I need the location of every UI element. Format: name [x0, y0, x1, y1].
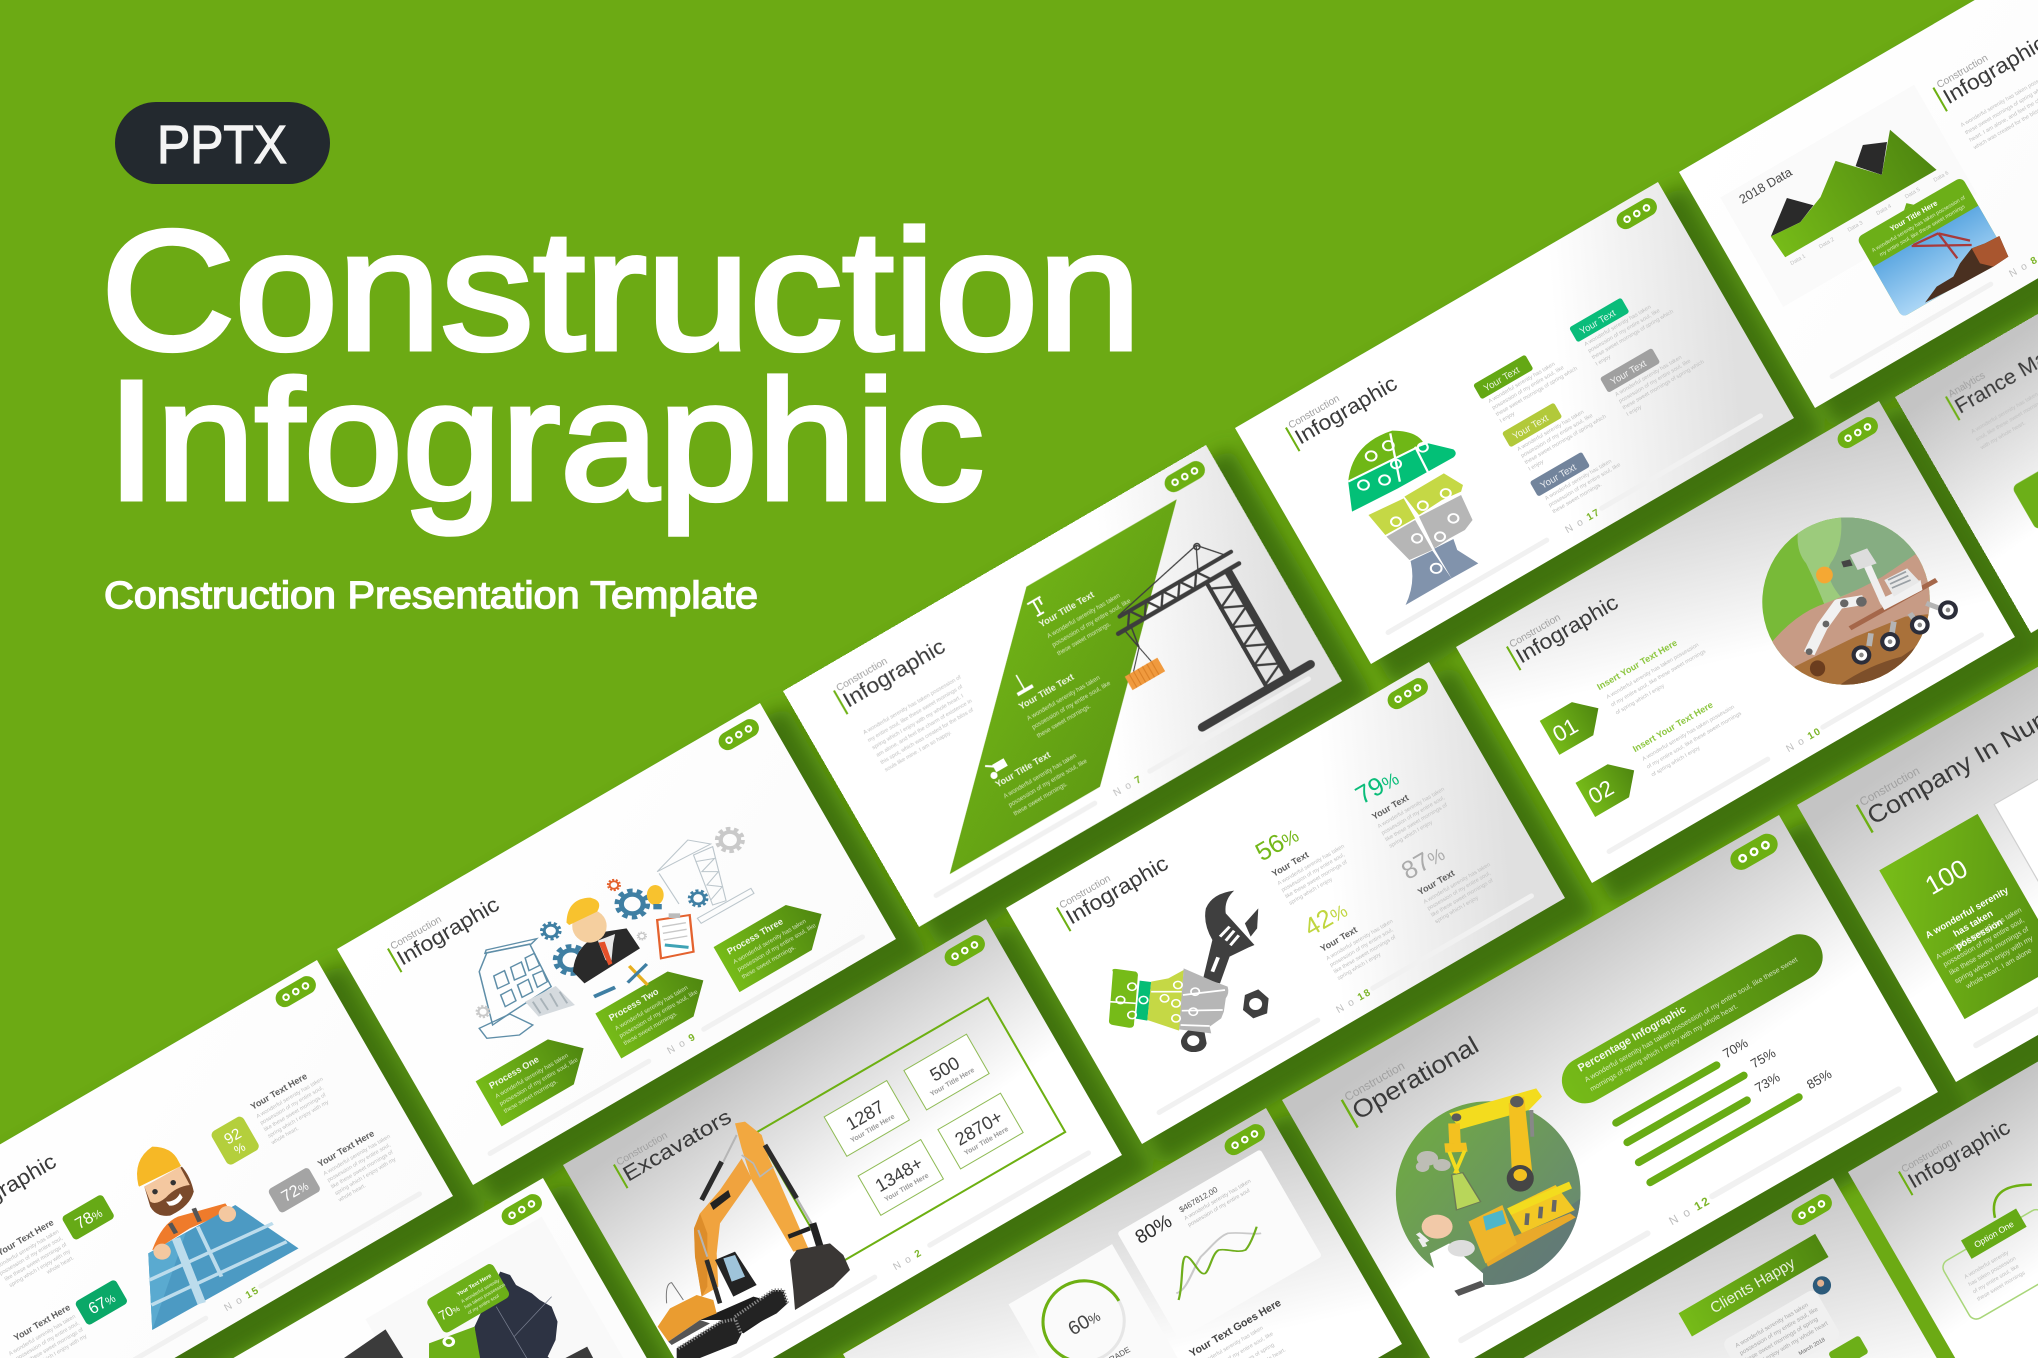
ring: 60% [1028, 1266, 1139, 1358]
item: first title: possession of my entire soul, like [1051, 597, 1133, 649]
label: slate [1530, 438, 1626, 518]
stat: 56%: A wonderful serenity has taken [1277, 844, 1346, 887]
callout pill: mornings of spring which I enjoy with my whole heart. [1589, 1002, 1739, 1093]
building outline [479, 939, 551, 1038]
callout: process one: A wonderful serenity has taken [494, 1052, 570, 1100]
stat box: 2870+ [938, 1093, 1023, 1169]
panel: slide No 17 helmet: Construction [1287, 393, 1342, 431]
item: second title [1005, 636, 1117, 740]
area chart: Data 1 [1790, 254, 1807, 267]
stat: 92%: 92 [221, 1125, 245, 1148]
stat: 87%: spring which I enjoy [1434, 895, 1480, 925]
line chart [1176, 1227, 1261, 1300]
clipboard [657, 913, 694, 958]
callout pill: A wonderful serenity has taken possession of my entire soul, like these sweet [1583, 956, 1799, 1084]
stat box: 1348+: Your Title Here [883, 1171, 930, 1204]
text: insert 2: Insert Your Text Here [1631, 700, 1715, 754]
text: insert 1: A wonderful serenity has taken possession [1606, 642, 1700, 701]
outlined box [1994, 715, 2038, 953]
arrow: 02: 02 [1584, 775, 1618, 809]
panel: slide No 10 rover: N o 10 [1785, 726, 1824, 755]
panel: slide France map: Analytics [1947, 370, 1987, 400]
text block: intro: spring which I enjoy with my whole heart. I [871, 693, 965, 751]
plans [525, 986, 575, 1017]
panel: slide France map: A wonderful serenity has taken [1971, 392, 2038, 435]
stat: 87%: 87% [1397, 839, 1449, 886]
stat box: 2870+: 2870+ [951, 1106, 1006, 1150]
panel: slide No 2 excavators: N o 2 [892, 1247, 925, 1273]
panel: slide option one: Construction [1900, 1137, 1955, 1175]
panel: slide company in numbers [1797, 520, 2038, 1082]
label: lime: A wonderful serenity has taken [1516, 409, 1585, 453]
text block: lower right [315, 1122, 407, 1204]
green stat card: possession [1954, 917, 2005, 953]
text block: your text: Your Text Goes Here [1187, 1297, 1283, 1358]
card: line chart [1117, 1149, 1322, 1340]
stat: 87%: Your Text [1416, 868, 1456, 897]
stat: 56%: possession of my entire soul, [1281, 852, 1346, 894]
panel: slide No 9 process [337, 703, 896, 1185]
illustration: puzzle head [1348, 431, 1478, 605]
stat: 42%: possession of my entire soul, [1329, 927, 1395, 969]
label: gray: Your Text [1609, 358, 1649, 388]
stat: 42%: like these sweet mornings of [1333, 934, 1397, 975]
header band [1679, 1234, 1829, 1336]
label: lime: Your Text [1511, 413, 1551, 442]
green button [1828, 1335, 1869, 1358]
chart heading: 2018 Data [1737, 165, 1795, 207]
stat: 72%: 72% [278, 1176, 312, 1206]
text block: lower left: A wonderful serenity has taken [8, 1314, 77, 1357]
option label [1961, 1208, 2027, 1259]
callout: 70% [425, 1262, 512, 1334]
quote card: possession of my entire soul, like [1738, 1306, 1820, 1357]
stat: 56% [1251, 803, 1357, 908]
arrow: 01 [1540, 692, 1609, 755]
photo: building and crane [1912, 233, 2008, 303]
stat: 78% [61, 1194, 115, 1241]
stat: 80%: 80% [1132, 1211, 1176, 1249]
label: green: Your Text [1482, 365, 1522, 394]
panel: slide No 7 crane [783, 445, 1342, 927]
green stat card [1879, 814, 2038, 1019]
area chart [1754, 115, 1950, 269]
panel: slide No 18 wrench: N o 18 [1335, 987, 1374, 1016]
photo card: Your Title Here [1888, 199, 1939, 233]
arc arrow [1985, 1177, 2037, 1218]
ring: 60%: 60% [1065, 1305, 1104, 1340]
text block: intro: my entire soul, like these sweet mornings of [867, 684, 964, 744]
nut [1243, 989, 1269, 1018]
item: third title: these sweet mornings. [1012, 781, 1069, 818]
stat: 42% [1299, 878, 1406, 983]
text block: upper left [0, 1217, 76, 1299]
label: lime: these sweet mornings of spring which [1524, 414, 1607, 466]
text block: lower left [1, 1302, 89, 1358]
text block: top right: A wonderful serenity has taken [256, 1077, 324, 1120]
label: teal [1569, 278, 1678, 370]
panel: slide France map: with my whole heart. [1979, 420, 2027, 452]
callout: process two [595, 958, 716, 1058]
illustration: hanging container [1125, 658, 1165, 690]
map of Australia and dark wedges [344, 1272, 593, 1358]
panel: slide France map [1895, 151, 2038, 633]
outlined option box: has taken possession [1968, 1256, 2017, 1288]
quote card [1722, 1288, 1842, 1358]
text block: intro [863, 675, 984, 773]
callout: 70%: of my entire soul [467, 1293, 500, 1316]
callout pill [1553, 926, 1831, 1112]
stat box: 500: Your Title Here [929, 1066, 976, 1098]
badge: PPTX [115, 102, 330, 184]
panel: slide No 12 operational: Operational [1347, 1031, 1483, 1125]
panel: slide No 18 wrench: Construction [1058, 873, 1113, 911]
illustration: robot arm and scientist [1416, 1088, 1576, 1293]
stat: 87%: possession of my entire soul, [1427, 870, 1492, 912]
text block: top right: possession of my entire soul, [259, 1085, 325, 1127]
green parallelogram [845, 499, 1281, 874]
item: second title: A wonderful serenity has taken [1026, 674, 1101, 722]
stat: 42%: Your Text [1319, 925, 1359, 954]
crane outline [657, 840, 754, 923]
green tile [2011, 461, 2038, 531]
text block: upper left: spring which I enjoy with my [8, 1249, 72, 1289]
puzzle hand [1109, 968, 1228, 1033]
text block: lower left: Your Text Here [12, 1302, 72, 1343]
arrow: 01: 01 [1548, 713, 1582, 747]
photo card [1854, 172, 2008, 318]
panel: slide No 9 process: N o 9 [666, 1031, 699, 1057]
illustration: rover [1806, 548, 1958, 676]
illustration: worker with panel [137, 1147, 299, 1330]
green stat card: like these sweet mornings of [1948, 925, 2030, 977]
bulb [647, 885, 664, 909]
item: third title: A wonderful serenity has taken [1002, 752, 1078, 800]
item: second title: possession of my entire soul, like [1031, 680, 1112, 731]
label: green: I enjoy [1499, 411, 1516, 424]
panel: slide No 10 rover [1456, 401, 2015, 883]
text block: lower right: Your Text Here [316, 1128, 376, 1169]
item: first title: Your Title Text [1037, 590, 1096, 629]
item: third title [985, 720, 1094, 818]
text block: upper left: like these sweet mornings of [4, 1242, 68, 1283]
green stat card: A wonderful serenity [1924, 885, 2011, 941]
label: slate: A wonderful serenity has taken [1544, 459, 1613, 502]
green stat card: whole heart. I am alone [1964, 947, 2033, 991]
avatar [1809, 1273, 1834, 1298]
illustration: wrench in puzzle hand [1109, 891, 1269, 1052]
stat box: 2870+: Your Title Here [963, 1125, 1010, 1157]
panel: slide No 17 helmet [1235, 182, 1794, 664]
panel: slide No 18 wrench [1006, 662, 1565, 1144]
photo card: my entire soul, like these sweet mornings [1879, 204, 1966, 258]
panel: slide No 7 crane: N o 7 [1112, 773, 1145, 799]
callout: 70%: has taken possession [463, 1282, 507, 1311]
stat: 80%: A wonderful serenity has taken [1183, 1179, 1252, 1222]
panel: slide No 17 helmet: Infographic [1291, 371, 1402, 449]
stat: 42%: A wonderful serenity has taken [1325, 919, 1394, 962]
main title [101, 196, 1141, 536]
text: insert 2: of my entire soul, like these sweet mornings [1646, 711, 1743, 770]
panel: slide No 2 excavators [563, 919, 1122, 1358]
option label: Option One [1972, 1219, 2016, 1250]
illustration: engineer, building and gears [477, 829, 754, 1038]
tools [594, 964, 648, 997]
title: Construction [1935, 53, 1990, 91]
callout: process three: A wonderful serenity has taken [732, 918, 807, 966]
card: ring [1009, 1244, 1178, 1358]
text block: lower right: whole heart. [337, 1183, 368, 1204]
green stat card: spring which I enjoy with my [1953, 934, 2035, 985]
callout: process two: possession of my entire soul, like [618, 988, 700, 1040]
header band: Clients Happy [1707, 1255, 1799, 1317]
panel: slide company in numbers: Construction [1857, 764, 1922, 809]
stat: 79%: Your Text [1370, 793, 1410, 822]
text block: intro: souls like mine. I am so happy. [884, 730, 953, 773]
label: lime: possession of my entire soul, like [1520, 413, 1594, 459]
stat: 56%: Your Text [1270, 850, 1310, 879]
panel: slide No 2 excavators: Construction [615, 1130, 670, 1168]
illustration: rover scene circle [1762, 518, 1930, 685]
panel: slide No 17 helmet: N o 17 [1564, 507, 1603, 536]
callout: process three: these sweet mornings. [741, 944, 797, 981]
label: lime [1502, 383, 1611, 475]
label: teal: I enjoy [1595, 354, 1612, 368]
label: gray: A wonderful serenity has taken [1614, 355, 1683, 398]
photo card: A wonderful serenity has taken possession of [1871, 195, 1967, 254]
engineer [566, 898, 640, 983]
item: first title: A wonderful serenity has taken [1046, 592, 1121, 640]
badge: PPTX: PPTX [157, 115, 287, 175]
stat box: 1287 [824, 1081, 909, 1156]
text: insert 1: Insert Your Text Here [1595, 638, 1679, 692]
callout: process two: A wonderful serenity has taken [614, 984, 689, 1032]
item: first title: these sweet mornings. [1056, 620, 1113, 657]
area chart: Data 3 [1847, 220, 1864, 234]
text block: top right: like these sweet mornings of [263, 1092, 328, 1133]
area chart: Data 5 [1904, 187, 1921, 200]
panel: slide No 12 operational: Construction [1342, 1059, 1407, 1104]
text block: upper left: possession of my entire soul, [0, 1235, 64, 1277]
green stat card: possession of my entire soul, [1942, 916, 2026, 969]
stat: 56%: like these sweet mornings of [1284, 859, 1349, 900]
label: gray: I enjoy [1626, 404, 1643, 418]
stat: 79%: A wonderful serenity has taken [1377, 787, 1446, 830]
text: insert 1 [1595, 627, 1712, 718]
text block: lower right: spring which I enjoy with my [334, 1157, 397, 1197]
text: insert 1: of spring which I enjoy [1615, 683, 1666, 716]
outlined option box: these sweet mornings [1976, 1270, 2026, 1303]
stat: 42%: spring which I enjoy [1337, 952, 1382, 982]
label: gray: these sweet mornings of spring which [1622, 359, 1705, 411]
label: slate: Your Text [1539, 462, 1579, 492]
stat: 92%: % [232, 1140, 248, 1157]
panel: slide No 7 crane: Construction [835, 656, 890, 694]
label: slate: these sweet mornings. [1552, 482, 1603, 515]
bar chart: 73% [1752, 1069, 1783, 1095]
illustration: excavator [658, 1122, 850, 1358]
stat: 79% [1351, 746, 1457, 851]
quote card: A wonderful serenity has taken [1734, 1302, 1810, 1350]
text: insert 2: of spring which I enjoy [1650, 745, 1701, 778]
callout: process one: possession of my entire soul, like [498, 1056, 580, 1107]
stat: 72% [267, 1167, 321, 1214]
label: gray: possession of my entire soul, like [1618, 358, 1692, 405]
stat: 56%: 56% [1251, 821, 1303, 867]
main title: Construction [101, 196, 1141, 386]
stat box: 1348+ [858, 1140, 943, 1215]
text block: intro: A wonderful serenity has taken possession of [863, 675, 963, 736]
panel: slide No 12 operational: N o 12 [1666, 1193, 1713, 1228]
text block: top right: whole heart. [270, 1125, 300, 1147]
callout: 70%: A wonderful serenity [460, 1278, 501, 1305]
stat box: 1348+: 1348+ [871, 1152, 926, 1196]
outlined option box [1940, 1207, 2038, 1322]
stat: 67%: 67% [85, 1289, 119, 1318]
green stat card: 100 [1920, 853, 1973, 901]
stat: 87%: A wonderful serenity has taken [1423, 862, 1492, 905]
panel: slide Australia map [120, 1178, 679, 1358]
green stat card: has taken [1951, 908, 1995, 940]
label: teal: Your Text [1578, 308, 1618, 337]
callout: process one: these sweet mornings. [503, 1078, 559, 1115]
arrow: 02 [1575, 754, 1644, 817]
panel: slide option one [1848, 926, 2038, 1358]
stat: 78%: 78% [72, 1203, 105, 1233]
stat: 79%: spring which I enjoy [1388, 820, 1434, 850]
panel: slide No 8 area chart [1679, 0, 2038, 408]
callout: process one: Process One [487, 1054, 541, 1091]
label: green: A wonderful serenity has taken [1488, 361, 1556, 405]
panel: slide clients happy [1410, 1178, 1969, 1358]
callout: process three: Process Three [725, 916, 785, 957]
stat box: 500: 500 [926, 1052, 963, 1085]
wrench details [1212, 927, 1239, 972]
stat: 87%: like these sweet mornings of [1430, 878, 1495, 919]
text: insert 1: of my entire soul, like these sweet mornings [1610, 649, 1707, 708]
label: slate: possession of my entire soul, like [1548, 462, 1622, 509]
panel: slide statistics chart [843, 1108, 1402, 1358]
panel: slide No 15 worker [0, 960, 453, 1358]
panel: slide No 2 excavators: Excavators [619, 1105, 735, 1186]
text block: lower right: like these sweet mornings of [330, 1149, 395, 1190]
item: third title: possession of my entire soul, like [1007, 757, 1089, 809]
stat: 80% [1132, 1166, 1256, 1254]
text block: upper left: whole heart. [45, 1255, 76, 1276]
text: insert 2: A wonderful serenity has taken possession [1641, 704, 1736, 763]
text block: lower right: possession of my entire soul, [326, 1142, 392, 1184]
callout: process one [476, 1026, 597, 1126]
stat: 80%: $467812,00 [1178, 1185, 1220, 1215]
green frame [756, 998, 1065, 1267]
panel: slide No 15 worker: N o 15 [223, 1285, 262, 1314]
label: teal: A wonderful serenity has taken [1583, 304, 1652, 348]
panel: slide No 9 process: Construction [389, 914, 444, 952]
illustration: circle scene [1396, 1101, 1580, 1285]
quote card: March 2018 [1798, 1337, 1826, 1357]
bar chart: 70% [1720, 1035, 1751, 1061]
area chart: Data 4 [1875, 204, 1893, 217]
ring hole [1187, 1035, 1199, 1046]
callout: process two: these sweet mornings. [622, 1010, 679, 1047]
item: third title: Your Title Text [994, 750, 1052, 790]
panel: slide No 10 rover: Construction [1508, 612, 1563, 650]
stat: 92% [210, 1115, 261, 1166]
bar chart: 75% [1748, 1045, 1779, 1071]
main title: Infographic [107, 346, 984, 536]
panel: slide option one: Infographic [1904, 1115, 2015, 1193]
label: gray [1600, 329, 1709, 420]
stat: 42%: 42% [1299, 896, 1352, 942]
callout: process two: Process Two [607, 986, 661, 1023]
illustration: tower crane [1094, 524, 1311, 743]
stat: 87% [1397, 822, 1503, 927]
stat box: 1287: 1287 [842, 1096, 888, 1134]
label: teal: possession of my entire soul, like [1587, 308, 1661, 354]
text block: intro: am alone, and feel the charm of existence in [875, 698, 973, 759]
text block: top right: Your Text Here [249, 1071, 309, 1112]
text block: intro: this spot, which was created for the bliss of [880, 707, 975, 766]
panel: slide No 7 crane: Infographic [839, 634, 950, 712]
green stat card: A wonderful serenity has taken [1935, 906, 2023, 961]
label: green: these sweet mornings of spring which [1495, 366, 1579, 418]
panel: slide No 10 rover: Infographic [1512, 590, 1623, 668]
callout: 70%: 70% [436, 1300, 462, 1323]
callout: 70%: Your Text Here [456, 1273, 493, 1298]
bar chart: 85% [1804, 1066, 1835, 1092]
label: green: possession of my entire soul, like [1491, 365, 1565, 411]
label: green [1473, 335, 1582, 427]
outlined option box: A wonderful serenity [1963, 1250, 2010, 1280]
text block: lower right: A wonderful serenity has taken [323, 1134, 392, 1177]
wrench [1181, 891, 1258, 1052]
item: second title: these sweet mornings. [1036, 703, 1092, 740]
stat: 80%: possession of my entire soul [1187, 1188, 1251, 1229]
text: insert 2 [1631, 689, 1747, 780]
stat: 79%: possession of my entire soul, [1381, 795, 1446, 837]
callout pill: Percentage Infographic [1576, 1003, 1688, 1075]
panel: slide No 12 operational [1282, 815, 1938, 1358]
area chart: Data 6 [1933, 170, 1950, 184]
callout: process three: possession of my entire soul, like [736, 922, 818, 973]
stat: 79%: like these sweet mornings of [1384, 802, 1449, 843]
label: teal: these sweet mornings of spring which [1591, 309, 1675, 361]
stat box: 500 [904, 1034, 989, 1110]
text block: top right [248, 1065, 340, 1147]
chart card [1720, 85, 1977, 307]
subtitle: Construction Presentation Template [104, 575, 758, 617]
outlined option box: of my entire soul, like [1972, 1264, 2020, 1295]
panel: slide No 9 process: Infographic [393, 892, 504, 970]
area chart: Data 2 [1818, 237, 1835, 250]
gears [477, 829, 742, 1017]
item: second title: Your Title Text [1017, 672, 1076, 712]
item: first title [1027, 558, 1138, 658]
text block: top right: spring which I enjoy with my [267, 1099, 330, 1140]
stat box: 1287: Your Title Here [849, 1112, 896, 1145]
stat: 56%: spring which I enjoy [1288, 877, 1334, 907]
stat: 79%: 79% [1351, 763, 1403, 810]
callout: process three [714, 892, 835, 992]
label: lime: I enjoy [1528, 459, 1545, 472]
stat: 67% [74, 1279, 128, 1326]
panel: slide No 18 wrench: Infographic [1062, 851, 1173, 929]
bar chart [1606, 1007, 1836, 1188]
